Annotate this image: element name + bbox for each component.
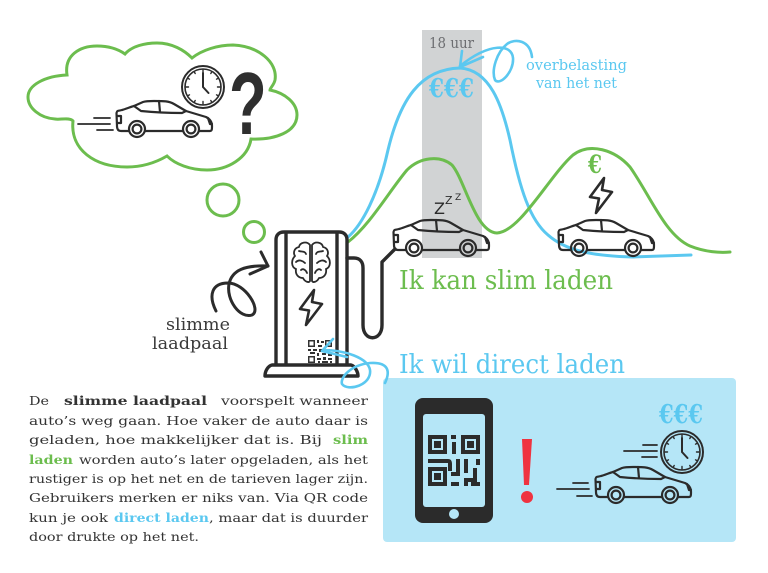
charging station: [265, 232, 395, 376]
icon: car with speed lines: [78, 101, 212, 137]
charging cable: [347, 249, 395, 338]
panel: direct laden: [383, 378, 736, 542]
label: slimme laadpaal: laadpaal: [152, 334, 228, 354]
icon: car: [394, 220, 489, 256]
question mark: ?: [229, 55, 267, 154]
text block: explanation: [29, 393, 368, 544]
pump base: [265, 365, 358, 376]
icon: brain: [292, 243, 330, 282]
zzz: [434, 193, 461, 218]
text block: explanation: rustiger is op het net en de tarieven lager zijn.: [29, 471, 368, 486]
text block: explanation: worden auto’s later opgeladen, als het: [79, 452, 368, 467]
icon: clock with speed lines: [624, 431, 703, 473]
zzz: Z: [434, 199, 445, 218]
text block: explanation: Gebruikers merken er niks van. Via QR code: [29, 490, 368, 505]
arrow: to smart pole: [212, 252, 268, 316]
icon: phone with QR code: [415, 398, 493, 523]
text block: explanation: laden: [29, 452, 73, 467]
text block: explanation: voorspelt wanneer: [220, 393, 368, 408]
sleeping car: [394, 193, 489, 256]
grey band: 18 uur: [422, 30, 482, 258]
text block: explanation: slimme laadpaal: [64, 393, 207, 408]
price: low: €: [587, 150, 602, 179]
charging car: [558, 178, 654, 256]
icon: small QR code: [308, 340, 332, 363]
text block: explanation: auto’s weg gaan. Hoe vaker de auto daar is: [29, 413, 368, 428]
label: 18 uur: 18 uur: [429, 36, 474, 52]
heading: Ik wil direct laden: Ik wil direct laden: [399, 350, 625, 380]
price: high: €€€: [428, 74, 474, 104]
text block: explanation: kun je ook: [29, 510, 109, 525]
icon: clock: [182, 66, 224, 108]
icon: car with speed lines: [557, 467, 691, 503]
text block: explanation: De: [29, 393, 49, 408]
label: overbelasting van het net: van het net: [535, 74, 617, 92]
text block: explanation: geladen, hoe makkelijker dat is. Bij: [29, 432, 322, 447]
label: overbelasting van het net: [526, 56, 627, 92]
label: slimme laadpaal: [152, 315, 230, 354]
label: slimme laadpaal: slimme: [166, 315, 230, 335]
panel background: [383, 378, 736, 542]
thought bubble large: [207, 184, 239, 216]
text block: explanation: direct laden: [114, 510, 209, 525]
cloud outline: [28, 43, 297, 170]
arrow: overload callout: [460, 41, 532, 81]
curve: smart charging load: [348, 149, 730, 252]
text block: explanation: door drukte op het net.: [29, 529, 199, 544]
label: overbelasting van het net: overbelasting: [526, 56, 627, 74]
heading: Ik kan slim laden: Ik kan slim laden: [399, 266, 613, 296]
zzz: Z: [445, 194, 453, 207]
pump body: [276, 232, 347, 365]
thought bubble small: [244, 222, 264, 242]
icon: exclamation mark: [521, 439, 533, 503]
text block: explanation: , maar dat is duurder: [209, 510, 368, 525]
icon: car: [558, 220, 654, 256]
text block: explanation: slim: [333, 432, 368, 447]
arrow: to QR code: [322, 339, 388, 387]
curve: direct charging load: [348, 68, 691, 257]
thought cloud: [28, 43, 297, 170]
zzz: Z: [455, 193, 461, 203]
price: high: €€€: [658, 400, 703, 430]
icon: lightning: [590, 178, 612, 213]
icon: lightning: [300, 290, 322, 325]
